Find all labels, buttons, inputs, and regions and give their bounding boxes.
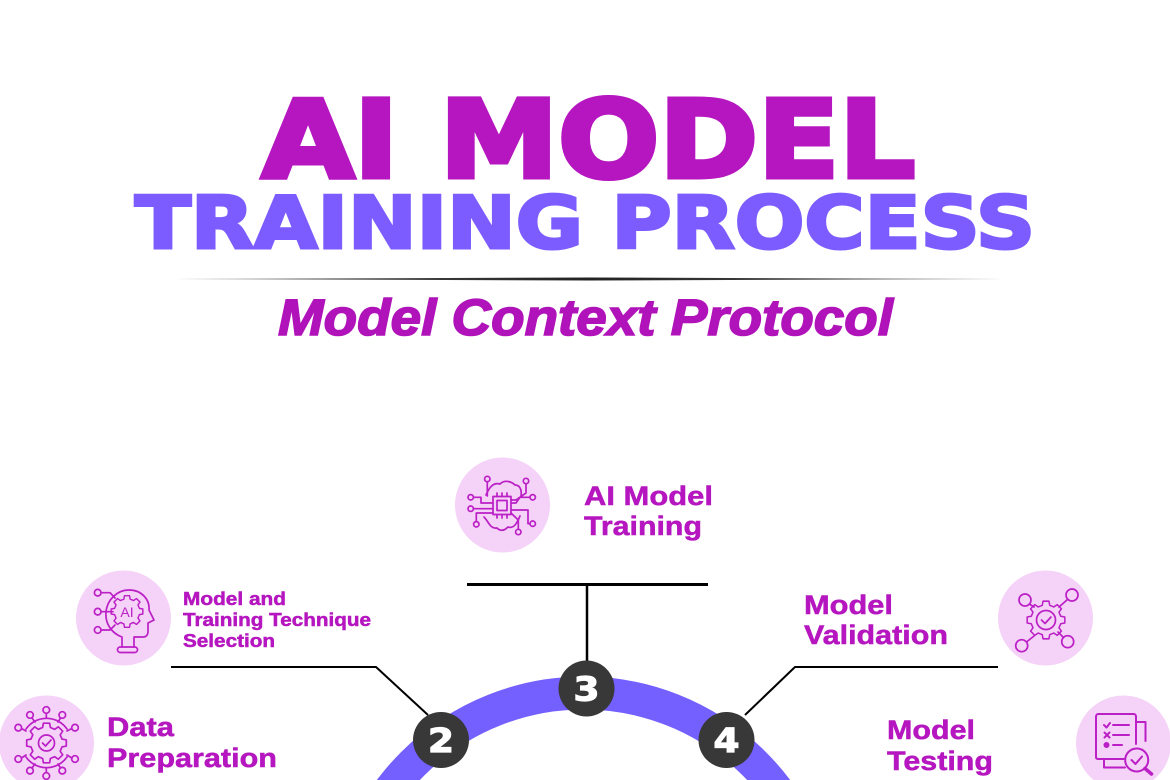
connector: step 3 [467, 583, 708, 586]
title: Training Process: TRAINING PROCESS [135, 181, 1035, 265]
title: AI Model: AI MODEL [262, 79, 915, 203]
label: Model Validation: Model [804, 590, 893, 620]
step marker 3: 3 [574, 670, 600, 708]
label: Data Preparation: Data [107, 712, 175, 742]
label: Model Testing: Model [887, 715, 975, 745]
label: Model and Training Technique Selection [183, 588, 371, 651]
step marker 2 [413, 712, 469, 768]
purple arc [342, 693, 825, 780]
icon: model selection head: AI [120, 604, 134, 620]
label: Model and Training Technique Selection: Selection [183, 630, 275, 651]
label: AI Model Training [584, 481, 713, 541]
icon: data preparation gear [0, 696, 94, 780]
step marker 4 [698, 712, 754, 768]
divider line [173, 278, 1006, 280]
subtitle: Model Context Protocol [278, 289, 895, 346]
step marker 4: 4 [714, 721, 740, 760]
step marker 3 [558, 660, 614, 716]
step marker 2: 2 [428, 721, 454, 760]
icon: model validation network gear [998, 570, 1093, 666]
label: Model Testing: Testing [887, 746, 993, 776]
label: Model and Training Technique Selection: Model and [183, 588, 286, 609]
icon: AI model training [455, 458, 550, 552]
label: Model Validation: Validation [804, 620, 948, 650]
connector: step 3 stem [586, 584, 588, 664]
label: Model and Training Technique Selection: Training Technique [183, 609, 371, 630]
label: AI Model Training: AI Model [584, 481, 713, 511]
label: AI Model Training: Training [584, 511, 702, 541]
connector: step 4 [745, 667, 998, 715]
label: Data Preparation [107, 712, 277, 773]
label: Model Testing [887, 715, 993, 776]
icon: model testing checklist [1076, 696, 1170, 780]
icon: model selection head [76, 570, 171, 666]
label: Model Validation [804, 590, 948, 650]
connector: step 2 [171, 667, 428, 715]
label: Data Preparation: Preparation [107, 743, 277, 773]
